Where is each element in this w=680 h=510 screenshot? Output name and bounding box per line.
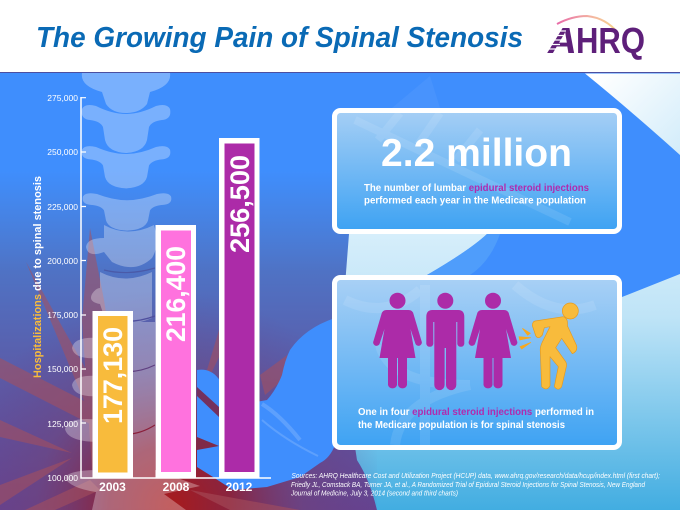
panel: 2.2 million	[334, 110, 620, 232]
panel 2 description: One in four epidural steroid injections performed in	[358, 406, 594, 418]
bar 2008: 2008	[163, 480, 190, 494]
y-axis: 275,000	[47, 93, 78, 103]
y-axis: 125,000	[47, 419, 78, 429]
panel 1 description: performed each year in the Medicare population	[364, 196, 586, 206]
bar 2012: 2012	[226, 480, 253, 494]
y-axis	[47, 93, 271, 483]
AHRQ logo: A	[547, 20, 577, 61]
bar 2008: 216,400	[161, 246, 191, 342]
AHRQ logo	[547, 16, 645, 61]
icon: person in pain	[519, 303, 578, 389]
bar 2003	[92, 311, 133, 494]
big number: 2.2 million	[381, 132, 572, 175]
header rule	[0, 72, 680, 74]
sources: Journal of Medicine, July 3, 2014 (second and third charts)	[290, 488, 458, 498]
bar 2012	[219, 138, 260, 494]
y-axis: 225,000	[47, 202, 78, 212]
icon: woman 2	[469, 293, 517, 388]
bar 2012: 256,500	[225, 155, 255, 253]
icon: woman 1	[373, 293, 422, 388]
y-axis: 175,000	[47, 310, 78, 320]
y-axis: 250,000	[47, 147, 78, 157]
y-axis: 150,000	[47, 364, 78, 374]
y-axis: 100,000	[47, 473, 78, 483]
panel 2 description: the Medicare population is for spinal stenosis	[358, 419, 565, 431]
panel 1 description	[364, 183, 589, 206]
AHRQ logo: HRQ	[576, 20, 645, 61]
bar 2008	[156, 225, 196, 494]
bar 2003: 2003	[99, 480, 126, 494]
panel 1 description: The number of lumbar epidural steroid injections	[364, 183, 589, 194]
y-axis: 200,000	[47, 256, 78, 266]
blue hand	[197, 318, 335, 490]
spine	[65, 73, 200, 510]
y-axis title: Hospitalizations due to spinal stenosis	[32, 176, 44, 378]
panel 2 description	[358, 406, 594, 431]
title: The Growing Pain of Spinal Stenosis	[36, 22, 523, 54]
header band	[0, 0, 680, 72]
panel: one in four	[334, 278, 620, 448]
red pain burst	[0, 228, 377, 510]
icon: man	[426, 293, 464, 390]
spine joints	[100, 268, 155, 434]
bar 2003: 177,130	[98, 327, 128, 424]
sources	[290, 471, 660, 498]
